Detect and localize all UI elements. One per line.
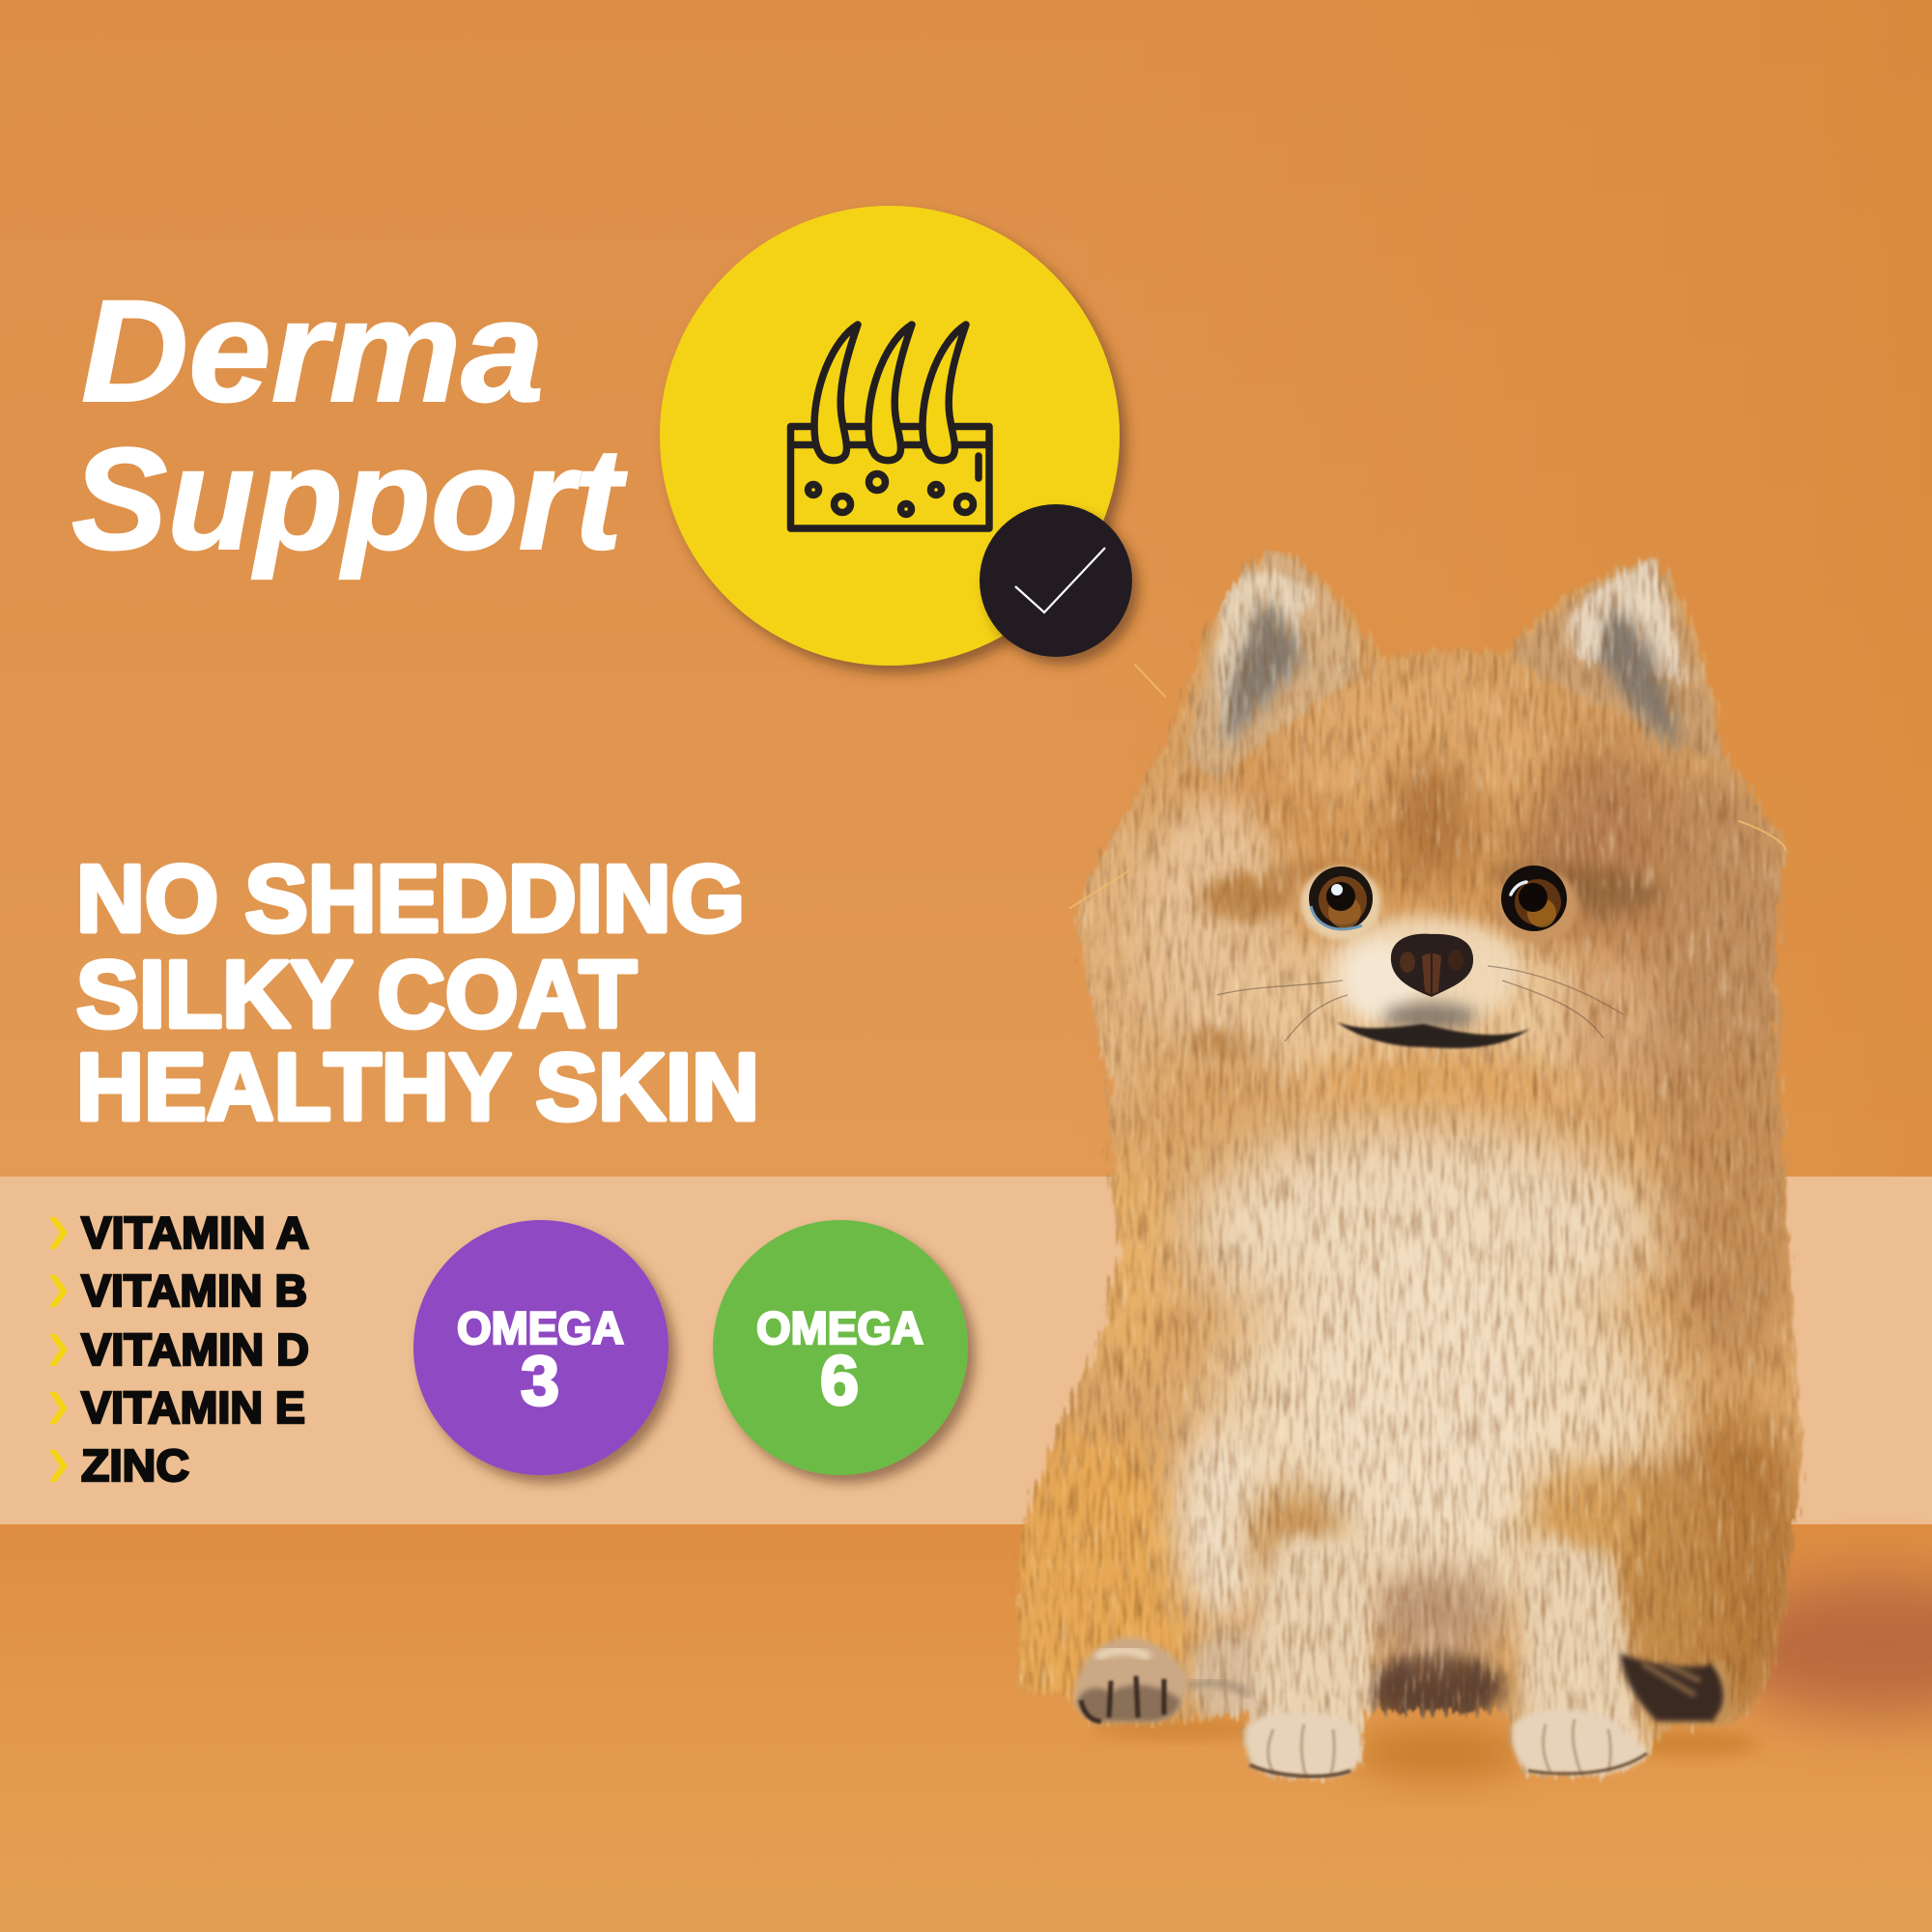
mane left golden bbox=[1016, 1430, 1184, 1725]
badge: Omega 6: OMEGA bbox=[756, 1302, 923, 1353]
benefit headline: HEALTHY SKIN bbox=[76, 1034, 759, 1140]
head bbox=[1223, 737, 1518, 939]
stray hairs bbox=[1070, 665, 1785, 908]
badge: black check circle bbox=[980, 504, 1132, 657]
badge: yellow circle with skin and hair icon bbox=[660, 206, 1120, 666]
photo of pomeranian dog bbox=[1014, 549, 1806, 1785]
right front paw bbox=[1512, 1709, 1649, 1776]
dog body and fur bbox=[1014, 549, 1806, 1785]
floor shadow behind dog bbox=[1092, 1577, 1932, 1780]
badge: Omega 3: OMEGA bbox=[457, 1302, 624, 1353]
right eye bbox=[1497, 866, 1578, 943]
title: Derma Support: Derma bbox=[81, 270, 544, 432]
title: Derma Support bbox=[71, 270, 628, 580]
nutrient list bbox=[49, 1208, 309, 1491]
title: Derma Support: Support bbox=[71, 417, 628, 580]
icon: check mark bbox=[1015, 548, 1105, 612]
badge: Omega 6 bbox=[713, 1220, 968, 1475]
right ear bbox=[1515, 574, 1723, 761]
benefit headline: NO SHEDDING bbox=[76, 845, 745, 952]
front legs bbox=[1252, 1536, 1373, 1777]
list item: Vitamin E: VITAMIN E bbox=[81, 1382, 305, 1433]
badge: Omega 3: 3 bbox=[521, 1343, 559, 1420]
left front paw bbox=[1245, 1712, 1361, 1777]
badge: Omega 3 bbox=[413, 1220, 668, 1475]
left eye bbox=[1300, 867, 1381, 940]
left back paw bbox=[1074, 1637, 1251, 1721]
floor bbox=[0, 1524, 1932, 1932]
chest bbox=[1183, 1125, 1657, 1338]
badge: Omega 6: 6 bbox=[820, 1343, 859, 1420]
list item: Vitamin A: VITAMIN A bbox=[81, 1208, 309, 1258]
list item: Zinc: ZINC bbox=[81, 1440, 189, 1491]
snout cream patch bbox=[1328, 917, 1521, 1025]
right back paw bbox=[1620, 1653, 1728, 1721]
translucent band bbox=[0, 1177, 1932, 1524]
list item: Vitamin D: VITAMIN D bbox=[81, 1324, 309, 1375]
belly shadow between legs bbox=[1365, 1650, 1504, 1727]
nose bbox=[1391, 934, 1473, 997]
left ear bbox=[1188, 551, 1362, 782]
whiskers bbox=[1217, 966, 1623, 1041]
hips bbox=[1584, 1459, 1719, 1710]
face details bbox=[1070, 665, 1785, 1048]
mouth bbox=[1337, 1022, 1530, 1048]
benefit headline bbox=[76, 845, 759, 1140]
benefit headline: SILKY COAT bbox=[76, 941, 637, 1047]
list item: Vitamin B: VITAMIN B bbox=[81, 1265, 307, 1316]
muzzle bbox=[1232, 927, 1608, 1101]
brow shading bbox=[1265, 861, 1381, 888]
mane right brown bbox=[1640, 766, 1787, 1128]
icon: hair follicles in skin bbox=[790, 325, 989, 528]
